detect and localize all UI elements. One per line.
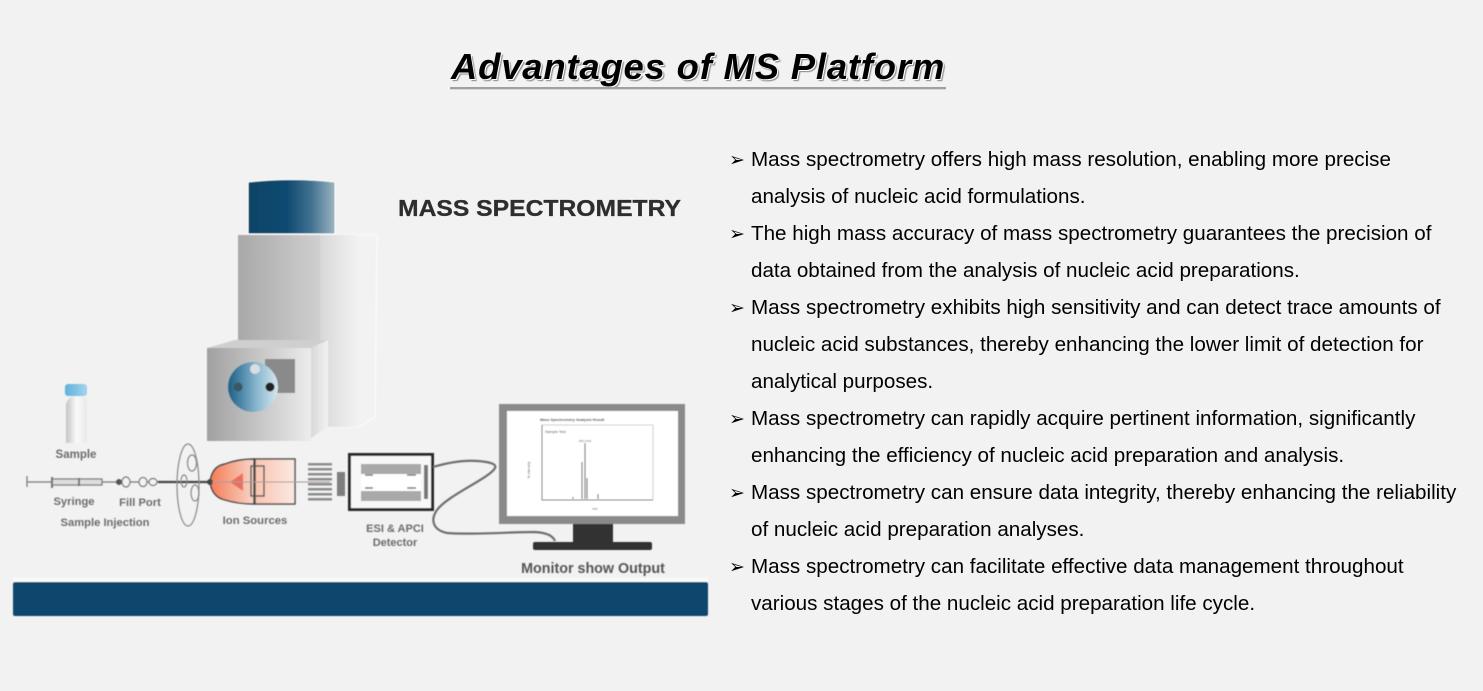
bullet list: advantages: various stages of the nucleic acid preparation life cycle. — [751, 592, 1255, 615]
icon: monitor with output spectrum: Sample Test — [545, 430, 567, 434]
icon: sample vial — [65, 384, 87, 443]
label: Syringe: Syringe — [53, 496, 95, 508]
icon: spectrometer tower — [207, 180, 377, 441]
bullet list: advantages — [729, 148, 1456, 615]
icon: quadrupole plates — [308, 463, 345, 500]
instrument artwork — [13, 180, 708, 616]
bullet list: advantages: analytical purposes. — [751, 370, 933, 393]
bullet list: advantages: Mass spectrometry can rapidly acquire pertinent information, significantly — [751, 407, 1415, 430]
bullet list: advantages: ➢ — [729, 556, 745, 578]
label: Sample Injection: Sample Injection — [61, 517, 150, 529]
icon: monitor with output spectrum: 585.1426 — [579, 439, 592, 443]
bullet list: advantages: ➢ — [729, 482, 745, 504]
icon: ion source — [158, 444, 330, 526]
icon: monitor with output spectrum: m/z — [592, 507, 598, 511]
icon: detector box — [350, 454, 432, 510]
bullet list: advantages: analysis of nucleic acid formulations. — [751, 185, 1086, 208]
label: Ion Sources: Ion Sources — [223, 515, 287, 527]
bullet list: advantages: Mass spectrometry can facilitate effective data management throughout — [751, 555, 1404, 578]
bullet 6 — [729, 555, 1404, 615]
icon: monitor with output spectrum — [499, 404, 685, 550]
diagram: mass spectrometry instrument — [12, 180, 709, 617]
arrow: cable from detector to monitor — [433, 461, 555, 541]
label: Monitor show Output: Monitor show Output — [521, 561, 665, 577]
bullet list: advantages: ➢ — [729, 297, 745, 319]
label: ESI & APCI Detector: Detector — [373, 537, 418, 549]
bullet list: advantages: ➢ — [729, 408, 745, 430]
icon: monitor with output spectrum: Mass Spectrometry Analysis Result — [540, 418, 605, 422]
bullet list: advantages: enhancing the efficiency of nucleic acid preparation and analysis. — [751, 444, 1344, 467]
bullet 3 — [729, 296, 1441, 393]
bullet list: advantages: of nucleic acid preparation analyses. — [751, 518, 1084, 541]
bullet list: advantages: Mass spectrometry can ensure data integrity, thereby enhancing the reliability — [751, 481, 1456, 504]
base bar — [13, 582, 708, 616]
bullet 4 — [729, 407, 1416, 467]
label: ESI & APCI Detector: ESI & APCI — [366, 523, 424, 535]
icon: monitor with output spectrum: % Intensity — [527, 461, 531, 479]
label: Fill Port: Fill Port — [119, 497, 161, 509]
bullet list: advantages: nucleic acid substances, thereby enhancing the lower limit of detection for — [751, 333, 1423, 356]
title underline — [450, 87, 946, 90]
bullet list: advantages: Mass spectrometry exhibits high sensitivity and can detect trace amounts of — [751, 296, 1441, 319]
bullet list: advantages: ➢ — [729, 149, 745, 171]
icon: syringe and fill port — [27, 476, 170, 488]
bullet list: advantages: The high mass accuracy of mass spectrometry guarantees the precision of — [751, 222, 1431, 245]
label: Sample: Sample — [56, 449, 96, 461]
title: Advantages of MS Platform — [451, 46, 945, 87]
bullet 5 — [729, 481, 1456, 541]
bullet list: advantages: Mass spectrometry offers high mass resolution, enabling more precise — [751, 148, 1391, 171]
bullet list: advantages: ➢ — [729, 223, 745, 245]
base highlight — [13, 578, 708, 583]
label: ESI & APCI Detector — [366, 523, 424, 549]
heading: MASS SPECTROMETRY: MASS SPECTROMETRY — [398, 195, 681, 221]
bullet 2 — [729, 222, 1432, 282]
bullet list: advantages: data obtained from the analysis of nucleic acid preparations. — [751, 259, 1300, 282]
bullet 1 — [729, 148, 1391, 208]
